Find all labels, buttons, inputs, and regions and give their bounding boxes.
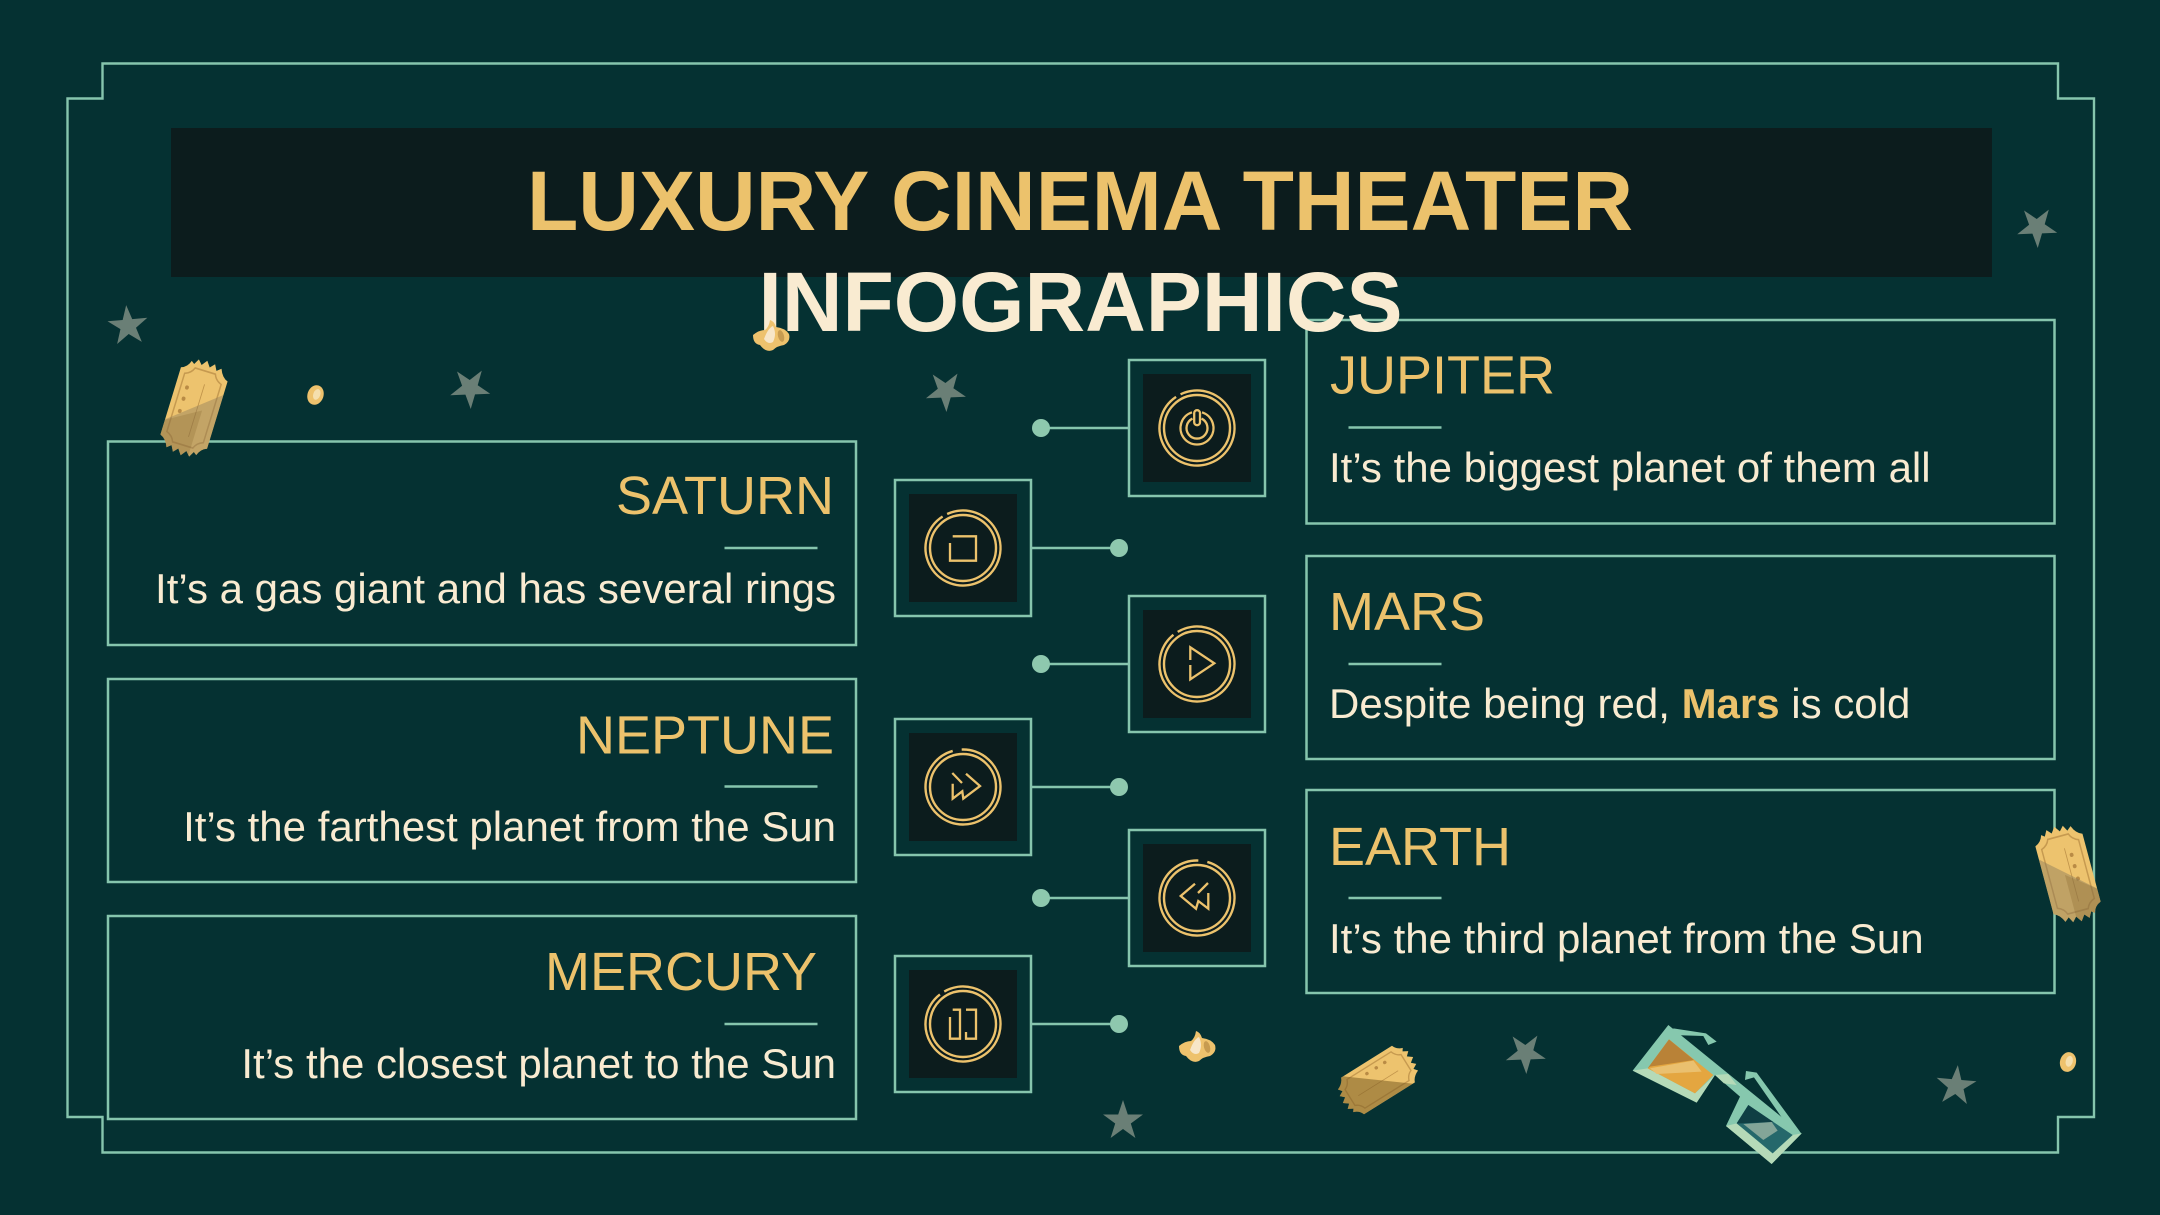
panel: Mars card bbox=[1306, 556, 2054, 759]
icon: ticket bottom bbox=[1338, 1046, 1418, 1114]
icon: fast forward button with connector bbox=[895, 719, 1128, 855]
icon: stop button with connector bbox=[895, 480, 1128, 616]
icon: 3D glasses bbox=[1633, 1025, 1802, 1164]
heading: Saturn: SATURN bbox=[616, 466, 834, 526]
title band bbox=[171, 128, 1992, 277]
divider: Mercury bbox=[724, 1023, 818, 1025]
icon: rewind button with connector bbox=[1032, 830, 1265, 966]
divider: Saturn bbox=[724, 547, 818, 549]
panel: Saturn card bbox=[108, 442, 856, 645]
icon: ticket top left bbox=[160, 359, 228, 457]
panel: Jupiter card bbox=[1306, 320, 2054, 524]
heading: Earth: EARTH bbox=[1329, 817, 1511, 877]
heading: Mercury: MERCURY bbox=[545, 942, 817, 1002]
star 1 bbox=[106, 303, 149, 345]
heading: Neptune: NEPTUNE bbox=[576, 706, 834, 766]
star 7 bbox=[1935, 1063, 1978, 1105]
text: Mercury description: It’s the closest planet to the Sun bbox=[241, 1040, 836, 1087]
icon: kernel left bbox=[305, 383, 326, 407]
panel: Mercury card bbox=[108, 916, 856, 1119]
star 6 bbox=[1505, 1035, 1546, 1075]
heading: Mars: MARS bbox=[1329, 582, 1485, 642]
decorative stars bbox=[106, 209, 2058, 1138]
icon: kernel right bbox=[2058, 1050, 2078, 1074]
star 4 bbox=[2016, 209, 2058, 249]
text: Earth description: It’s the third planet from the Sun bbox=[1329, 915, 1924, 962]
icon: pause button with connector bbox=[895, 956, 1128, 1092]
icon: ticket right bbox=[2035, 826, 2101, 922]
text: Neptune description: It’s the farthest planet from the Sun bbox=[183, 803, 836, 850]
panel: Earth card bbox=[1306, 790, 2054, 993]
icon: play button with connector bbox=[1032, 596, 1265, 732]
star 3 bbox=[925, 373, 966, 413]
text: Mars description: Despite being red, Mars is cold bbox=[1329, 680, 1910, 727]
divider: Mars bbox=[1348, 663, 1442, 665]
text: Saturn description: It’s a gas giant and has several rings bbox=[155, 565, 836, 612]
icon: popcorn bottom bbox=[1179, 1031, 1215, 1062]
divider: Neptune bbox=[724, 785, 818, 788]
heading: Jupiter: JUPITER bbox=[1330, 346, 1555, 406]
icon: power button with connector bbox=[1032, 360, 1265, 496]
divider: Jupiter bbox=[1348, 426, 1442, 429]
star 5 bbox=[1103, 1100, 1143, 1138]
title: LUXURY CINEMA THEATER bbox=[527, 154, 1633, 248]
icon: popcorn by title bbox=[753, 320, 789, 351]
title: INFOGRAPHICS bbox=[758, 255, 1403, 349]
text: Jupiter description: It’s the biggest planet of them all bbox=[1329, 444, 1931, 491]
divider: Earth bbox=[1348, 897, 1442, 899]
star 2 bbox=[449, 370, 491, 410]
panel: Neptune card bbox=[108, 679, 856, 882]
